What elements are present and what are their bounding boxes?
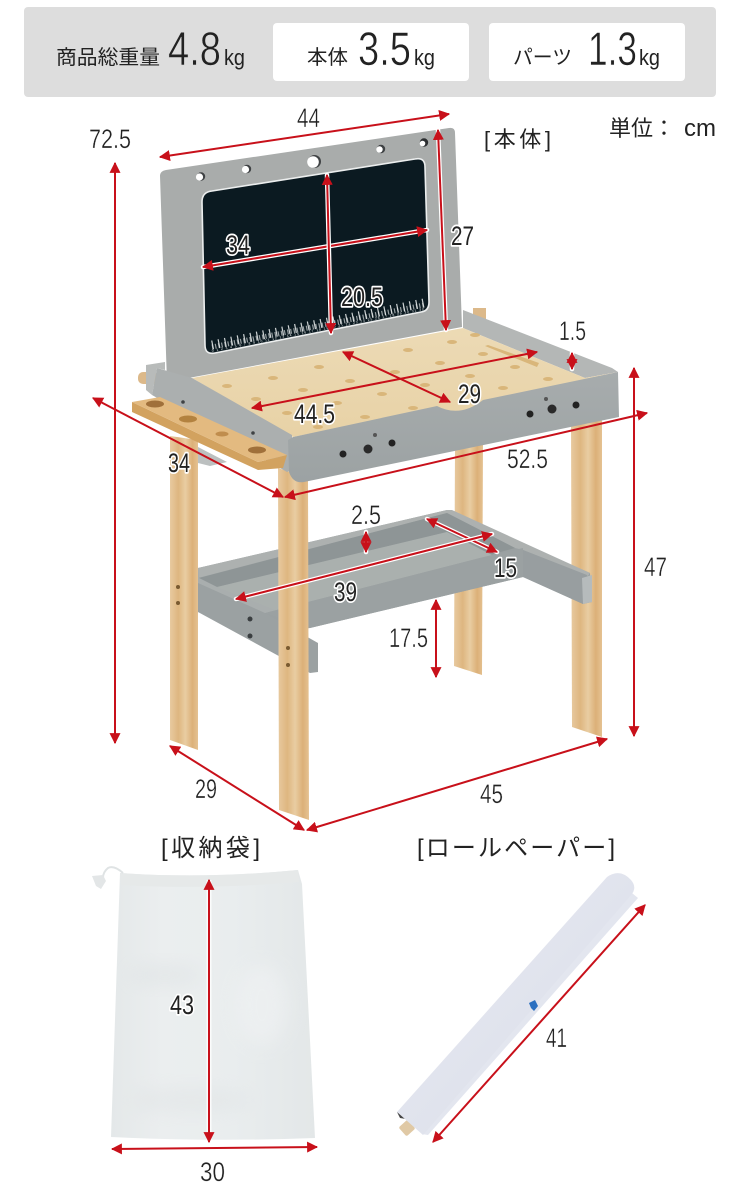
tray left rail	[146, 362, 292, 472]
dimension: shelf depth 15	[427, 519, 517, 583]
dimension: backboard height 27	[438, 130, 474, 330]
wooden peg board	[192, 328, 618, 437]
drawstring	[103, 867, 123, 878]
weight: parts	[489, 22, 685, 81]
dimension: overall width 52.5: 52.5	[507, 444, 548, 474]
heading: storage bag: [収納袋]	[161, 835, 260, 862]
blackboard	[202, 159, 429, 353]
dowel pegs	[138, 308, 486, 384]
bracket under tray	[198, 447, 227, 466]
dimension: total height 72.5: 72.5	[89, 124, 131, 154]
dimension: shelf wall 2.5	[351, 500, 381, 552]
dimension: blackboard width 34	[203, 230, 427, 267]
dimension: leg width 45: 45	[480, 779, 503, 809]
weight: total	[56, 22, 245, 75]
tool rack	[132, 397, 287, 470]
heading: roll paper: [ロールペーパー]	[417, 835, 615, 862]
weight: parts: kg	[639, 45, 660, 70]
dimension: overall width 52.5	[285, 413, 647, 497]
dimension: backboard height 27: 27	[451, 221, 474, 251]
dimension: shelf depth 15: 15	[494, 553, 517, 583]
dimension: shelf clearance 17.5	[389, 600, 436, 677]
dimension: tray width 44.5: 44.5	[294, 399, 335, 429]
illustration: workbench	[132, 128, 619, 820]
dimension: tray depth 29	[343, 352, 481, 409]
dimension: backboard width 44: 44	[297, 103, 320, 133]
weight: main body: 本体	[307, 46, 348, 69]
dimension: tray rail height 1.5: 1.5	[559, 316, 586, 346]
dimension: shelf width 39: 39	[334, 577, 357, 607]
dimension: leg width 45	[307, 739, 607, 830]
tray back rail	[463, 310, 618, 378]
ruler: 0 1 2 3 4 5 6 7 8 9 10 11 12 13 14 15 16 17 18 19 20 21 22 23 24 25 26 27 28 29 30 31 32	[211, 307, 424, 353]
dimension: shelf clearance 17.5: 17.5	[389, 623, 428, 653]
dimension: blackboard height 20.5	[327, 175, 383, 333]
dimension: tray width 44.5	[252, 352, 537, 429]
dimension: overall depth 34	[93, 398, 283, 497]
rail screws	[181, 400, 255, 435]
dimension: blackboard width 34: 34	[226, 230, 250, 260]
front and left legs	[170, 436, 309, 820]
dimension: leg depth 29: 29	[195, 774, 217, 804]
dimension: bag height 43: 43	[170, 990, 194, 1020]
dimension: roll length 41	[433, 905, 645, 1142]
weight: main body: 3.5	[358, 22, 411, 75]
unit label: 単位： cm	[609, 115, 716, 142]
weight: main body	[273, 22, 469, 81]
dimension: leg depth 29	[170, 746, 304, 830]
dimension: backboard width 44	[160, 103, 449, 157]
tray front face	[288, 372, 619, 482]
backboard	[160, 128, 462, 382]
lower shelf	[198, 510, 592, 673]
panel: weight summary	[24, 7, 716, 97]
weight: total: kg	[224, 45, 245, 70]
weight: total: 4.8	[168, 22, 221, 75]
blue logo	[529, 1000, 538, 1011]
dimension: roll length 41: 41	[546, 1023, 567, 1053]
heading: main body: [本体]	[484, 127, 551, 152]
dimension: blackboard height 20.5: 20.5	[341, 282, 383, 312]
dimension: table height 47: 47	[644, 552, 667, 582]
illustration: storage bag	[92, 867, 315, 1140]
dimension: overall depth 34: 34	[168, 448, 190, 478]
dimension: tray rail height 1.5	[559, 316, 586, 369]
dimension: tray depth 29: 29	[458, 379, 481, 409]
back legs	[454, 418, 602, 737]
illustration: roll paper	[397, 873, 638, 1136]
weight: total: 商品総重量	[56, 46, 160, 69]
dimension: shelf width 39	[236, 534, 492, 607]
weight: parts: 1.3	[588, 22, 637, 75]
dimension: shelf wall 2.5: 2.5	[351, 500, 381, 530]
weight: main body: kg	[414, 45, 435, 70]
dimension: bag width 30: 30	[200, 1157, 225, 1187]
weight: parts: パーツ	[513, 47, 572, 69]
